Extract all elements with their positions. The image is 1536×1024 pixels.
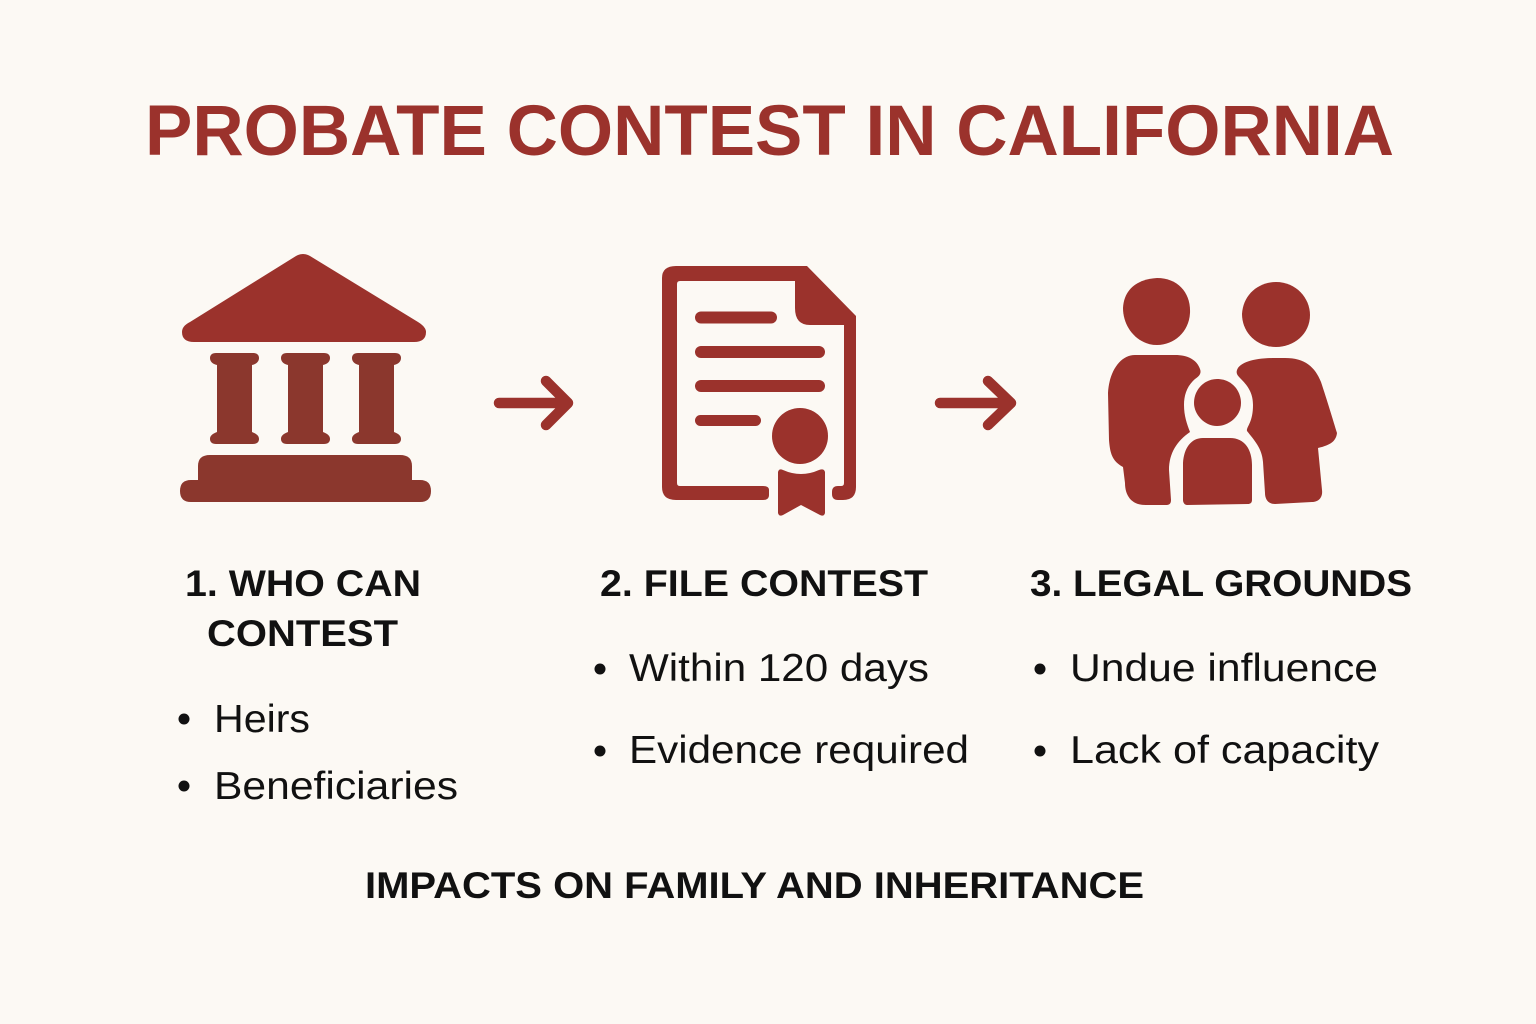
icon: document with seal <box>662 266 856 516</box>
column 1: who can contest <box>178 563 458 808</box>
footer heading: IMPACTS ON FAMILY AND INHERITANCE <box>365 865 1144 906</box>
list: who can contest <box>178 698 458 808</box>
list: who can contest: Beneficiaries <box>214 765 458 808</box>
heading: file contest: 2. FILE CONTEST <box>600 563 928 604</box>
arrow: courthouse to document <box>499 381 568 425</box>
list: file contest <box>594 647 969 772</box>
icon: family <box>1108 278 1337 505</box>
list: legal grounds: Undue influence <box>1070 647 1378 690</box>
list: legal grounds <box>1034 647 1380 772</box>
heading: legal grounds: 3. LEGAL GROUNDS <box>1030 563 1412 604</box>
heading: who can contest <box>185 563 421 654</box>
heading: who can contest: CONTEST <box>207 613 398 654</box>
list: who can contest: Heirs <box>214 698 310 741</box>
column 2: file contest <box>594 563 969 772</box>
arrow: document to family <box>940 381 1011 425</box>
heading: who can contest: 1. WHO CAN <box>185 563 421 604</box>
icon: courthouse <box>180 254 431 502</box>
list: file contest: Evidence required <box>629 729 969 772</box>
list: file contest: Within 120 days <box>629 647 929 690</box>
list: legal grounds: Lack of capacity <box>1070 729 1380 772</box>
column 3: legal grounds <box>1030 563 1412 772</box>
title: PROBATE CONTEST IN CALIFORNIA <box>145 92 1394 171</box>
